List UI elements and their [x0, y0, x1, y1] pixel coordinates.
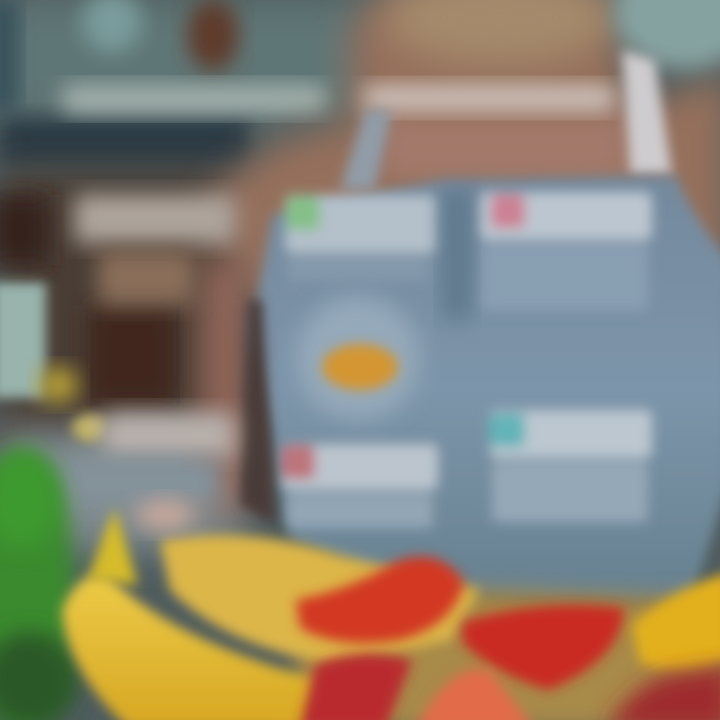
apron centre fold: [442, 190, 472, 320]
apron dark seam: [240, 300, 275, 525]
produce base: [290, 590, 720, 720]
panel: centre circle badge: [296, 296, 420, 420]
tomatoes and peppers: [296, 557, 624, 720]
left bottles and jar: [0, 194, 236, 506]
shelf items: [0, 0, 327, 114]
right-side yellow pepper and red fruit: [606, 572, 720, 720]
panel: top-left card: [285, 195, 435, 280]
corner: teal shape top right: [613, 0, 720, 70]
panel: lower-left card: [281, 444, 438, 528]
icon: orange badge: [322, 344, 398, 390]
icon: red square: [281, 445, 315, 479]
apron straps: [340, 50, 672, 190]
necklace band: [362, 84, 617, 112]
apron: [252, 175, 720, 605]
bananas: [62, 499, 480, 720]
icon: pink square: [491, 194, 525, 228]
panel: top-right card: [480, 192, 652, 310]
person: skin: [200, 0, 720, 510]
panel: lower-right card: [489, 410, 652, 522]
green leaves: [0, 450, 78, 720]
icon: teal square: [489, 413, 525, 447]
icon: green square: [286, 196, 320, 230]
